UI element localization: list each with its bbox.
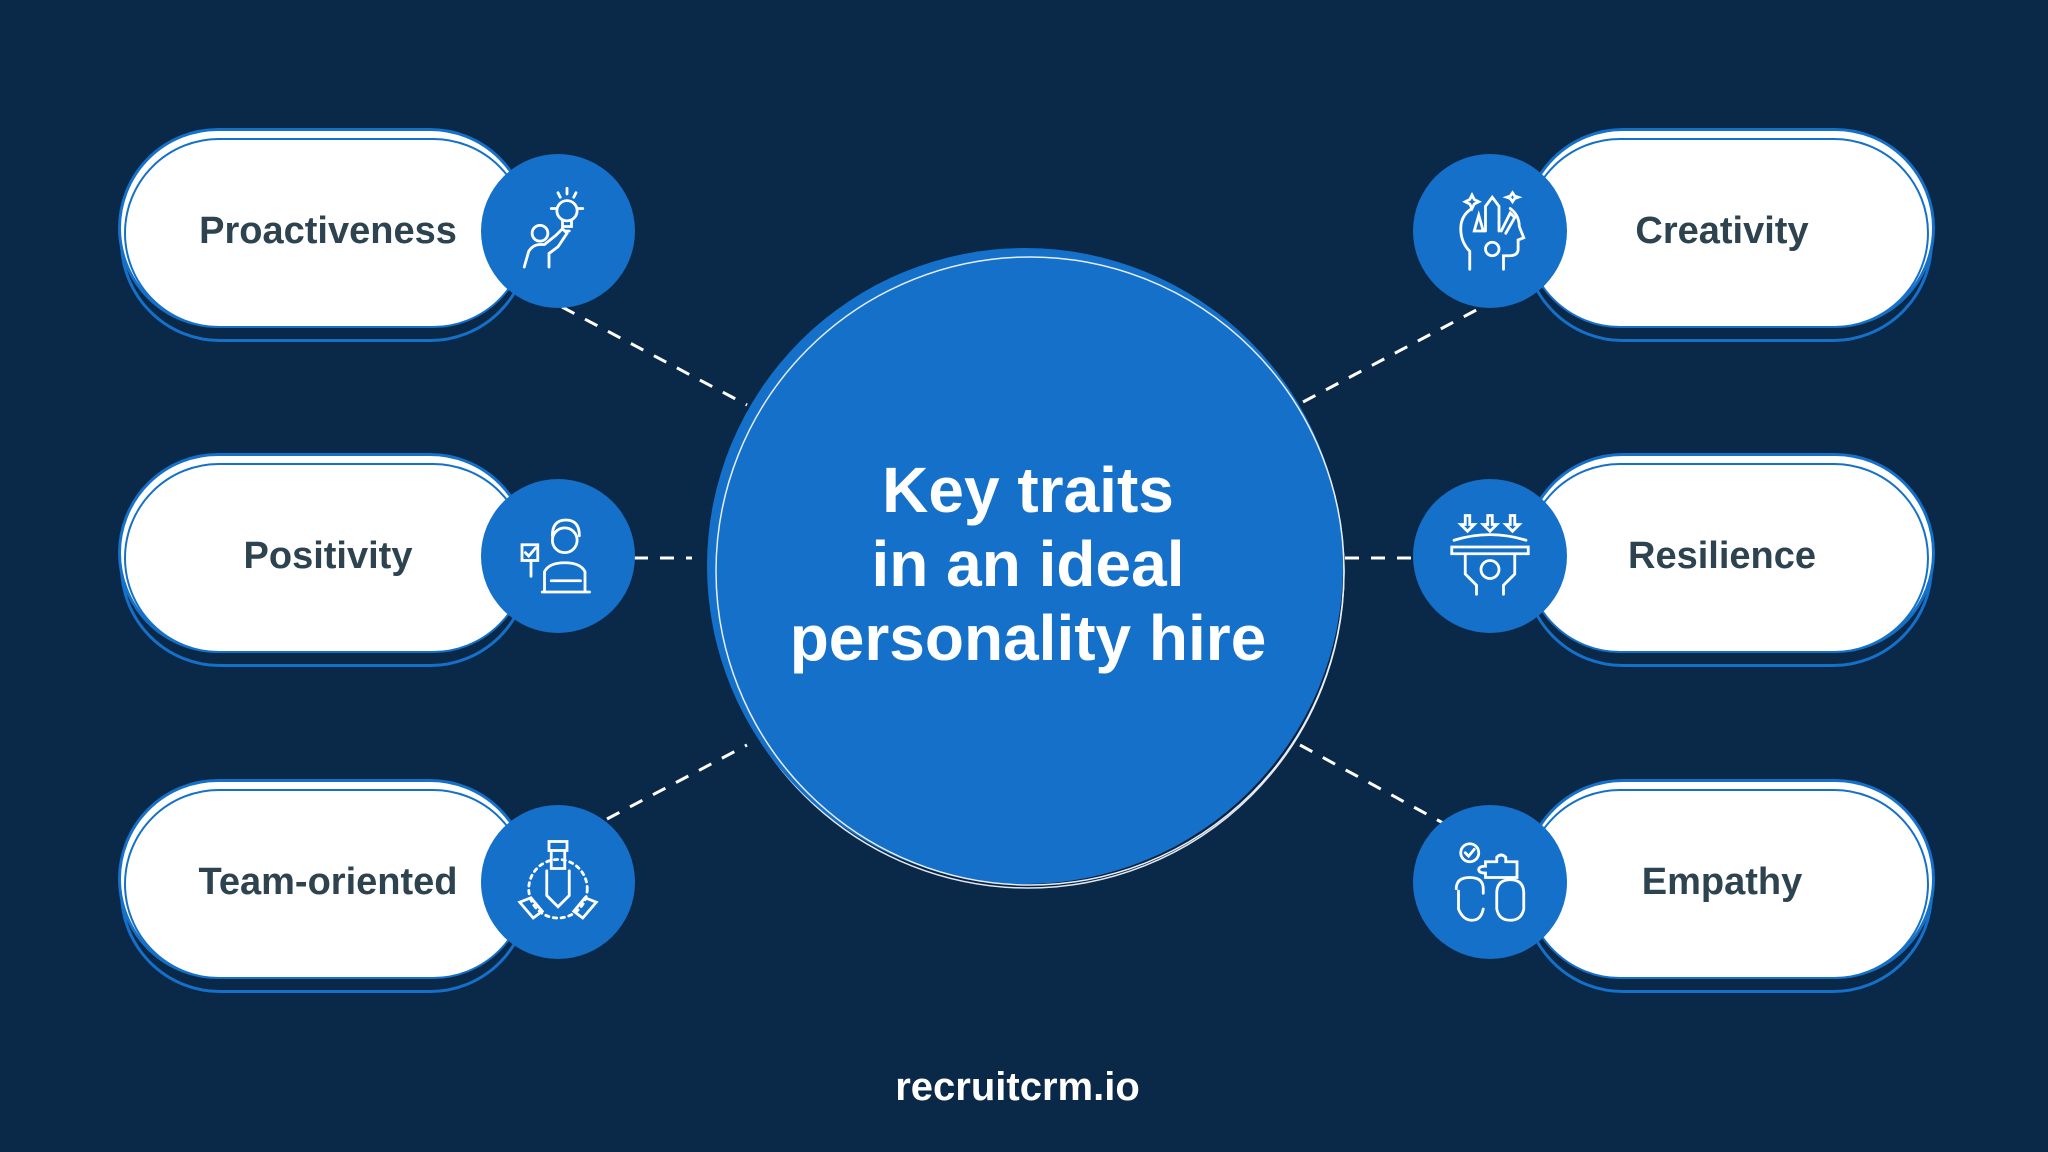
pill: Positivity: Positivity <box>244 535 412 577</box>
pill: Team-oriented: Team-oriented <box>198 861 458 903</box>
pill: Proactiveness <box>118 128 515 342</box>
icon: creative head <box>1413 154 1567 308</box>
icon: resilience <box>1413 479 1567 633</box>
pill: Resilience: Resilience <box>1628 535 1816 577</box>
icon: person with checklist <box>481 479 635 633</box>
icon: empathy <box>1413 805 1567 959</box>
title <box>790 454 1266 674</box>
title: Key traits <box>882 454 1174 526</box>
pill: Creativity: Creativity <box>1635 210 1809 252</box>
footer brand: recruitcrm.io <box>895 1065 1140 1109</box>
pill: Empathy <box>1536 779 1935 993</box>
pill: Empathy: Empathy <box>1642 861 1802 903</box>
pill: Positivity <box>118 453 515 667</box>
icon: person with lightbulb <box>481 154 635 308</box>
pill: Proactiveness: Proactiveness <box>199 210 457 252</box>
icon: team hands <box>481 805 635 959</box>
title: in an ideal <box>872 528 1184 600</box>
pill: Team-oriented <box>118 779 515 993</box>
center circle <box>707 248 1345 889</box>
pill: Resilience <box>1536 453 1935 667</box>
title: personality hire <box>790 602 1266 674</box>
pill: Creativity <box>1536 128 1935 342</box>
